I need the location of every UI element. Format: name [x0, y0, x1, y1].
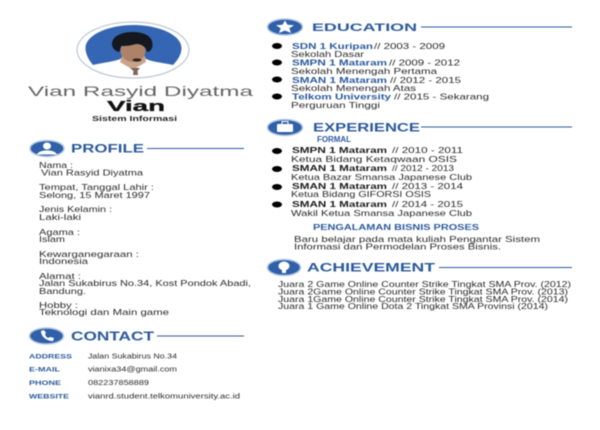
- icon: contact phone: [30, 328, 64, 344]
- nickname: Vian: [107, 99, 165, 115]
- profile photo: [77, 22, 189, 78]
- contact details: Jalan Sukabirus No.34: [88, 354, 177, 360]
- education list: SMPN 1 Mataram: [292, 58, 388, 68]
- profile details: Selong, 15 Maret 1997: [39, 190, 150, 200]
- experience list: [272, 145, 472, 218]
- icon: achievement light bulb: [268, 260, 300, 276]
- profile details: Alamat :: [39, 271, 81, 281]
- experience list: SMPN 1 Mataram: [292, 145, 388, 155]
- education list: [272, 41, 489, 110]
- experience list: Ketua Bidang Ketaqwaan OSIS: [291, 154, 457, 164]
- profile details: Tempat, Tanggal Lahir :: [39, 182, 154, 192]
- icon: profile person: [30, 140, 64, 156]
- heading: education: EDUCATION: [312, 22, 417, 34]
- achievement list: Juara 2Game Online Counter Strike Tingkat SMA Prov. (2013): [278, 286, 568, 296]
- education list: Sekolah Menengah Pertama: [291, 66, 437, 76]
- education list: // 2003 - 2009: [374, 41, 445, 51]
- profile details: Vian Rasyid Diyatma: [41, 168, 143, 178]
- profile details: Hobby :: [39, 300, 78, 310]
- experience list: // 2012 - 2013: [392, 163, 454, 173]
- achievement list: Juara 2 Game Online Counter Strike Tingkat SMA Prov. (2012): [278, 279, 571, 289]
- education list: SDN 1 Kuripan: [292, 41, 373, 51]
- subheading: business process experience: PENGALAMAN BISNIS PROSES: [313, 223, 480, 232]
- profile details: Jalan Sukabirus No.34, Kost Pondok Abadi,: [39, 278, 251, 288]
- education list: SMAN 1 Mataram: [292, 75, 388, 85]
- experience list: // 2010 - 2011: [392, 145, 463, 155]
- contact details: vianrd.student.telkomuniversity.ac.id: [88, 394, 240, 400]
- name: Vian Rasyid Diyatma: [28, 83, 253, 99]
- profile details: Nama :: [39, 160, 73, 170]
- education list: Telkom University: [292, 92, 391, 102]
- experience list: SMAN 1 Mataram: [292, 199, 388, 209]
- achievement list: [278, 279, 571, 311]
- education list: // 2009 - 2012: [389, 58, 460, 68]
- icon: experience briefcase: [268, 120, 302, 136]
- achievement list: Juara 1Game Online Counter Strike Tingkat SMA Prov. (2014): [278, 294, 568, 304]
- education list: // 2015 - Sekarang: [394, 92, 489, 102]
- experience list: // 2013 - 2014: [392, 181, 463, 191]
- profile details: Bandung.: [39, 286, 86, 296]
- heading: achievement: ACHIEVEMENT: [307, 260, 436, 274]
- experience list: SMAN 1 Mataram: [292, 163, 388, 173]
- experience list: Ketua Bazar Smansa Japanese Club: [291, 172, 472, 182]
- subheading: formal: FORMAL: [317, 135, 351, 144]
- icon: education star: [268, 19, 302, 35]
- experience list: SMAN 1 Mataram: [292, 181, 388, 191]
- business process description: Informasi dan Permodelan Proses Bisnis.: [294, 242, 501, 252]
- achievement list: Juara 1 Game Online Dota 2 Tingkat SMA Provinsi (2014): [278, 301, 548, 311]
- profile details: [39, 160, 251, 317]
- major: Sistem Informasi: [92, 114, 177, 123]
- profile details: Laki-laki: [39, 212, 81, 222]
- heading: contact: CONTACT: [71, 330, 154, 344]
- contact details: E-MAIL: [29, 366, 60, 374]
- business process description: Baru belajar pada mata kuliah Pengantar Sistem: [294, 234, 540, 244]
- education list: Sekolah Dasar: [291, 49, 364, 59]
- profile details: Teknologi dan Main game: [39, 307, 169, 317]
- experience list: Wakil Ketua Smansa Japanese Club: [291, 208, 472, 218]
- education list: Perguruan Tinggi: [291, 100, 380, 110]
- contact details: [29, 354, 240, 400]
- contact details: PHONE: [29, 380, 62, 387]
- contact details: WEBSITE: [29, 394, 70, 400]
- business process description: [294, 234, 540, 252]
- contact details: vianixa34@gmail.com: [88, 366, 177, 374]
- experience list: Ketua Bidang GIFORSI OSIS: [291, 189, 431, 199]
- heading: profile: PROFILE: [71, 142, 144, 156]
- profile details: Agama :: [39, 227, 80, 237]
- profile details: Indonesia: [39, 256, 88, 266]
- contact details: ADDRESS: [29, 354, 73, 360]
- profile details: Kewarganegaraan :: [39, 249, 139, 259]
- profile details: Islam: [39, 234, 65, 244]
- education list: Sekolah Menengah Atas: [291, 83, 416, 93]
- heading: experience: EXPERIENCE: [313, 122, 420, 134]
- profile details: Jenis Kelamin :: [39, 204, 112, 214]
- experience list: // 2014 - 2015: [392, 199, 463, 209]
- education list: // 2012 - 2015: [390, 75, 461, 85]
- contact details: 082237858889: [88, 380, 149, 387]
